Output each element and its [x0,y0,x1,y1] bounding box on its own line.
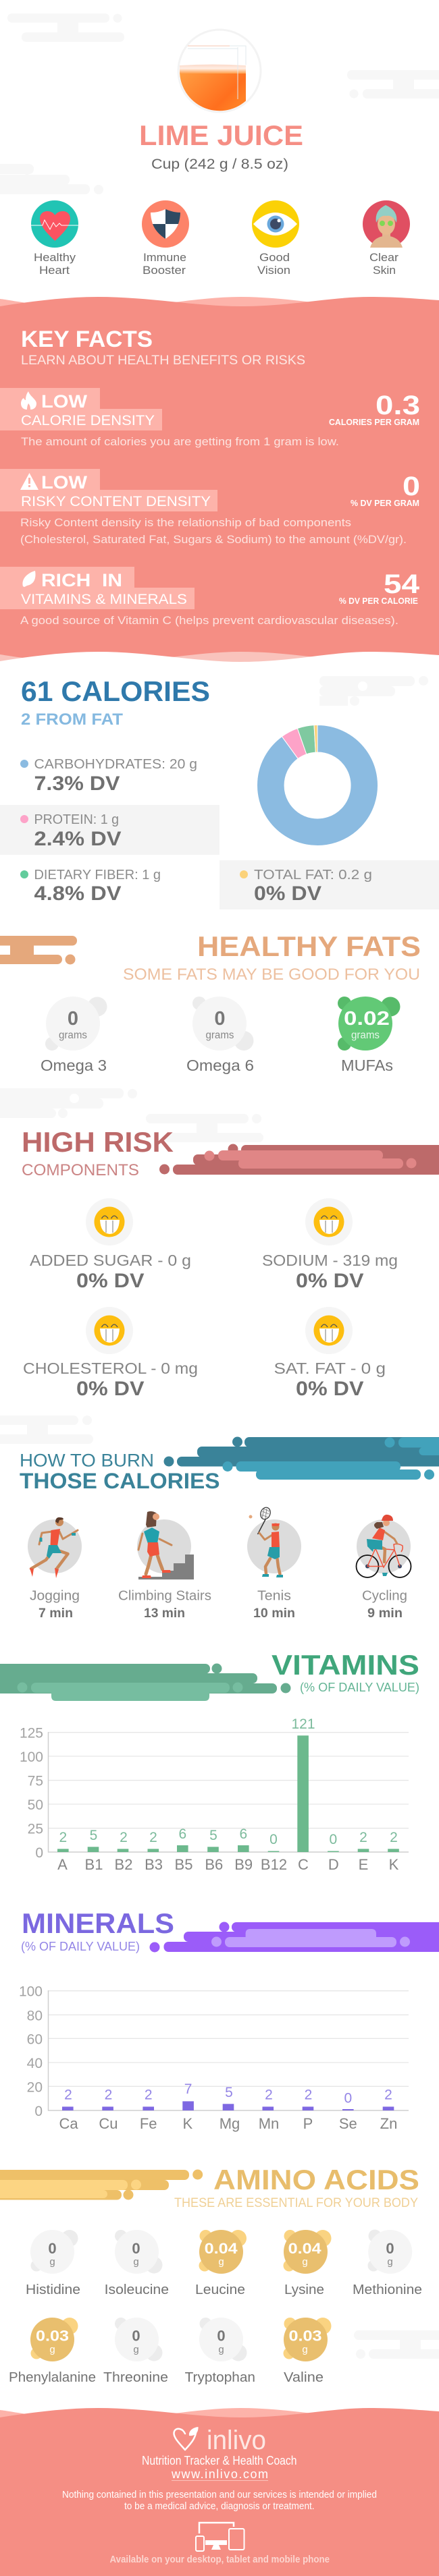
bar chart: vitamins: C [298,1856,309,1873]
fat: mufas: 0.02 [344,1008,390,1030]
bar chart: vitamins: E [359,1856,368,1873]
amino: isoleucine [105,2230,169,2297]
legend: carbohydrates: 7.3% DV [34,773,120,795]
bar chart: vitamins: 2 [59,1830,67,1845]
fat: omega 3: Omega 3 [41,1057,107,1074]
bar chart: minerals: 60 [27,2032,43,2047]
fact: risky content density: (Cholesterol, Saturated Fat, Sugars & Sodium) to the amount (%DV/gr). [20,533,407,546]
fact: rich in vitamins and minerals [0,567,420,627]
panel: key facts [0,297,439,668]
amino: histidine [26,2230,80,2297]
risk: sodium [262,1198,398,1292]
activity: climbing stairs: Climbing Stairs [118,1588,211,1603]
risk: added sugar: 0% DV [76,1270,145,1292]
legend: dietary fiber [20,868,161,905]
fact: risky content density [0,469,420,546]
activity: cycling [357,1515,411,1621]
bar chart: vitamins: A [57,1856,68,1873]
bar chart: vitamins: 5 [90,1828,97,1843]
amino: lysine: 0.04 [288,2240,322,2257]
legend: carbohydrates [20,757,197,795]
bar chart: vitamins: 6 [239,1826,247,1842]
fact: rich in vitamins and minerals: % DV PER CALORIE [339,596,418,606]
amino: tryptophan: Tryptophan [185,2370,255,2385]
risk: cholesterol: CHOLESTEROL - 0 mg [23,1360,198,1377]
disclaimer: to be a medical advice, diagnosis or treatment. [124,2500,315,2512]
benefit: clear skin: Clear [369,251,398,264]
legend: total fat: TOTAL FAT: 0.2 g [254,868,372,883]
bar chart: vitamins: B3 [145,1856,163,1873]
subheading: components: COMPONENTS [22,1161,139,1179]
legend: total fat: 0% DV [254,883,321,905]
fat: mufas: grams [351,1030,380,1041]
amino: phenylalanine: 0.03 [36,2328,69,2344]
bar chart: vitamins: 0 [269,1832,278,1847]
amino: threonine: g [133,2344,139,2355]
amino: tryptophan [185,2318,255,2385]
amino: histidine: 0 [48,2240,57,2257]
legend: total fat [220,860,439,909]
amino: phenylalanine [9,2318,96,2385]
benefit: healthy heart: Heart [39,264,70,277]
bar chart: vitamins: B12 [261,1856,287,1873]
bar chart: minerals [19,1984,409,2132]
heading: calories: 61 CALORIES [21,675,210,707]
activity: cycling: Cycling [362,1588,407,1603]
fact: risky content density: % DV PER GRAM [351,498,419,508]
subheading: LEARN ABOUT HEALTH BENEFITS OR RISKS [21,354,305,368]
bar chart: minerals: 7 [184,2081,192,2097]
amino: isoleucine: Isoleucine [105,2283,169,2297]
bar chart: minerals: 0 [34,2104,43,2119]
amino: valine: g [302,2344,308,2355]
bar chart: vitamins: 25 [28,1822,43,1837]
heading: key facts: KEY FACTS [21,327,153,352]
amino: methionine [353,2229,422,2297]
heading: healthy fats: HEALTHY FATS [197,930,421,962]
bar chart: minerals: 20 [27,2079,43,2095]
banner: vitamins [0,1664,290,1701]
amino: valine: Valine [284,2370,324,2385]
amino: threonine: Threonine [103,2370,168,2385]
fact: risky content density: Risky Content density is the relationship of bad components [20,516,351,529]
fat: mufas [338,997,400,1074]
amino: leucine: g [218,2256,224,2268]
amino: threonine: 0 [132,2328,140,2344]
fact: calorie density: The amount of calories you are getting from 1 gram is low. [21,435,339,448]
bar chart: minerals: 2 [265,2088,273,2103]
bar chart: vitamins [20,1716,409,1873]
risk: sodium: 0% DV [296,1270,363,1292]
bar chart: vitamins: 0 [35,1845,43,1861]
heading: those calories: THOSE CALORIES [20,1469,220,1493]
activity: jogging: Jogging [30,1588,80,1603]
benefit: immune booster: Immune [143,251,186,264]
fact: risky content density: RISKY CONTENT DENSITY [21,494,211,509]
benefit: immune booster: Booster [143,264,186,277]
bar chart: minerals: 2 [305,2088,312,2103]
legend: dietary fiber: 4.8% DV [34,883,122,905]
fact: calorie density [0,388,420,448]
bar chart: minerals: Mn [259,2115,279,2132]
disclaimer [62,2489,377,2512]
bar chart: vitamins: B2 [115,1856,132,1873]
activity: jogging: 7 min [38,1606,73,1621]
icon: devices [196,2523,244,2551]
bar chart: vitamins: 0 [330,1832,337,1847]
bar chart: minerals: 2 [64,2088,72,2103]
activity: cycling: 9 min [367,1606,403,1621]
amino: leucine [195,2230,247,2297]
benefit: clear skin: Skin [373,264,396,277]
bar chart: minerals: P [303,2115,313,2132]
risk: added sugar [30,1198,191,1292]
amino: leucine: Leucine [195,2283,245,2297]
legend: protein: PROTEIN: 1 g [34,812,119,827]
bar chart: minerals: 2 [145,2088,153,2103]
activity: tennis: 10 min [253,1606,295,1621]
bar chart: vitamins: 2 [149,1830,157,1845]
bar chart: minerals: Zn [380,2115,397,2132]
bar chart: vitamins: D [328,1856,339,1873]
fat: omega 6: Omega 6 [186,1057,254,1074]
activity: tennis [247,1506,301,1621]
activity: climbing stairs [118,1511,211,1621]
bar chart: minerals: K [182,2115,192,2132]
fact: risky content density: 0 [403,472,420,501]
fat: mufas: MUFAs [341,1057,393,1074]
bar chart: minerals: 0 [344,2091,352,2106]
bar chart: minerals: Se [339,2115,357,2132]
banner: amino acids [0,2170,203,2200]
fat: omega 3: 0 [68,1008,78,1030]
bar chart: vitamins: 100 [20,1749,43,1765]
bar chart: minerals: Fe [140,2115,157,2132]
heading: minerals: MINERALS [22,1907,174,1939]
bar chart: minerals: 40 [27,2056,43,2071]
bar chart: minerals: 80 [27,2008,43,2023]
amino: methionine: Methionine [353,2283,422,2297]
bar chart: vitamins: K [389,1856,399,1873]
bar chart: minerals: 2 [384,2088,392,2103]
bar chart: vitamins: 75 [28,1774,43,1789]
activity: tennis: Tenis [257,1588,291,1603]
amino: leucine: 0.04 [205,2240,238,2257]
benefit: healthy heart [31,200,78,277]
bar chart: minerals: 2 [105,2088,112,2103]
fact: risky content density: LOW [41,472,88,493]
amino: lysine: Lysine [284,2283,324,2297]
fact: calorie density: CALORIES PER GRAM [329,417,419,427]
bar chart: vitamins: 121 [291,1716,315,1732]
logo wordmark: inlivo [207,2426,266,2455]
activity: jogging [28,1517,82,1621]
heading: amino acids: AMINO ACIDS [213,2164,419,2195]
legend: dietary fiber: DIETARY FIBER: 1 g [34,868,161,883]
amino: methionine: g [387,2256,393,2268]
amino: phenylalanine: g [49,2344,55,2355]
subheading: healthy fats: SOME FATS MAY BE GOOD FOR YOU [123,965,420,984]
bar chart: vitamins: 5 [209,1828,217,1843]
donut chart [257,725,378,846]
bar chart: vitamins: 2 [390,1830,398,1845]
benefit: good vision: Vision [257,264,290,277]
banner: minerals [150,1922,439,1953]
amino: methionine: 0 [386,2240,394,2257]
serving size: Cup (242 g / 8.5 oz) [151,157,288,172]
banner: high risk [159,1144,439,1175]
amino: isoleucine: 0 [132,2240,140,2257]
fat: omega 6: 0 [214,1008,226,1030]
legend: protein [0,805,220,855]
benefit: immune booster [142,200,189,277]
fact: rich in vitamins and minerals: RICH IN [41,570,122,590]
bar chart: vitamins: 2 [120,1830,128,1845]
subheading: from fat: 2 FROM FAT [21,710,123,729]
bar chart: vitamins: 125 [20,1726,43,1741]
bar chart: vitamins: B1 [85,1856,103,1873]
risk: saturated fat [274,1307,386,1400]
legend: carbohydrates: CARBOHYDRATES: 20 g [34,757,197,772]
benefit: good vision: Good [259,251,290,264]
heading: vitamins: VITAMINS [272,1649,419,1681]
activity: climbing stairs: 13 min [144,1606,185,1621]
icon: inlivo heart logo [174,2427,199,2450]
fact: rich in vitamins and minerals: A good source of Vitamin C (helps prevent cardiovascular diseases). [20,614,398,627]
banner: burn calories [163,1437,439,1480]
fat: omega 6: grams [205,1030,234,1041]
risk: saturated fat: 0% DV [296,1378,363,1400]
legend: protein: 2.4% DV [34,828,122,850]
title: LIME JUICE [139,119,303,151]
bar chart: vitamins: 50 [28,1797,43,1813]
banner: healthy fats [0,936,77,965]
fact: calorie density: CALORIE DENSITY [21,413,155,428]
amino: tryptophan: 0 [217,2328,226,2344]
bar chart: minerals: 5 [225,2085,233,2100]
benefit: good vision [252,200,299,277]
subheading: minerals: (% OF DAILY VALUE) [21,1939,140,1953]
amino: lysine: g [302,2256,308,2268]
panel: footer [0,2408,439,2576]
risk: added sugar: ADDED SUGAR - 0 g [30,1252,191,1269]
fat: omega 3: grams [59,1030,87,1041]
amino: valine [284,2318,331,2385]
benefit: clear skin [363,200,410,277]
amino: isoleucine: g [133,2256,139,2268]
amino: histidine: g [49,2256,55,2268]
bar chart: vitamins: 6 [178,1826,186,1842]
icon: glass of juice [178,30,261,112]
risk: cholesterol [23,1307,198,1400]
amino: threonine [103,2318,168,2385]
amino: tryptophan: g [218,2344,224,2355]
risk: sodium: SODIUM - 319 mg [262,1252,398,1269]
amino: phenylalanine: Phenylalanine [9,2370,96,2385]
benefit: healthy heart: Healthy [34,251,76,264]
amino: valine: 0.03 [289,2328,321,2344]
availability note: Available on your desktop, tablet and mobile phone [109,2554,330,2565]
fact: rich in vitamins and minerals: 54 [384,569,420,599]
bar chart: vitamins: B6 [205,1856,223,1873]
bar chart: minerals: Ca [59,2115,78,2132]
bar chart: vitamins: 2 [359,1830,367,1845]
fact: calorie density: 0.3 [376,391,420,420]
fact: rich in vitamins and minerals: VITAMINS & MINERALS [21,592,187,607]
website link: www.inlivo.com [171,2467,268,2481]
risk: cholesterol: 0% DV [76,1378,145,1400]
bar chart: vitamins: B5 [175,1856,192,1873]
tagline: Nutrition Tracker & Health Coach [142,2454,297,2467]
bar chart: vitamins: B9 [234,1856,253,1873]
bar chart: minerals: 100 [19,1984,43,2000]
heading: how to burn: HOW TO BURN [20,1451,154,1471]
amino: histidine: Histidine [26,2283,80,2297]
amino: lysine [284,2230,331,2297]
subheading: amino acids: THESE ARE ESSENTIAL FOR YOUR BODY [174,2196,418,2210]
heading: high risk: HIGH RISK [22,1126,174,1158]
risk: saturated fat: SAT. FAT - 0 g [274,1360,386,1377]
bar chart: minerals: Mg [220,2115,240,2132]
subheading: vitamins: (% OF DAILY VALUE) [300,1680,419,1694]
fact: calorie density: LOW [41,391,88,412]
fat: omega 3 [41,997,107,1074]
disclaimer: Nothing contained in this presentation and our services is intended or implied [62,2489,377,2500]
fat: omega 6 [186,997,254,1074]
bar chart: minerals: Cu [99,2115,118,2132]
